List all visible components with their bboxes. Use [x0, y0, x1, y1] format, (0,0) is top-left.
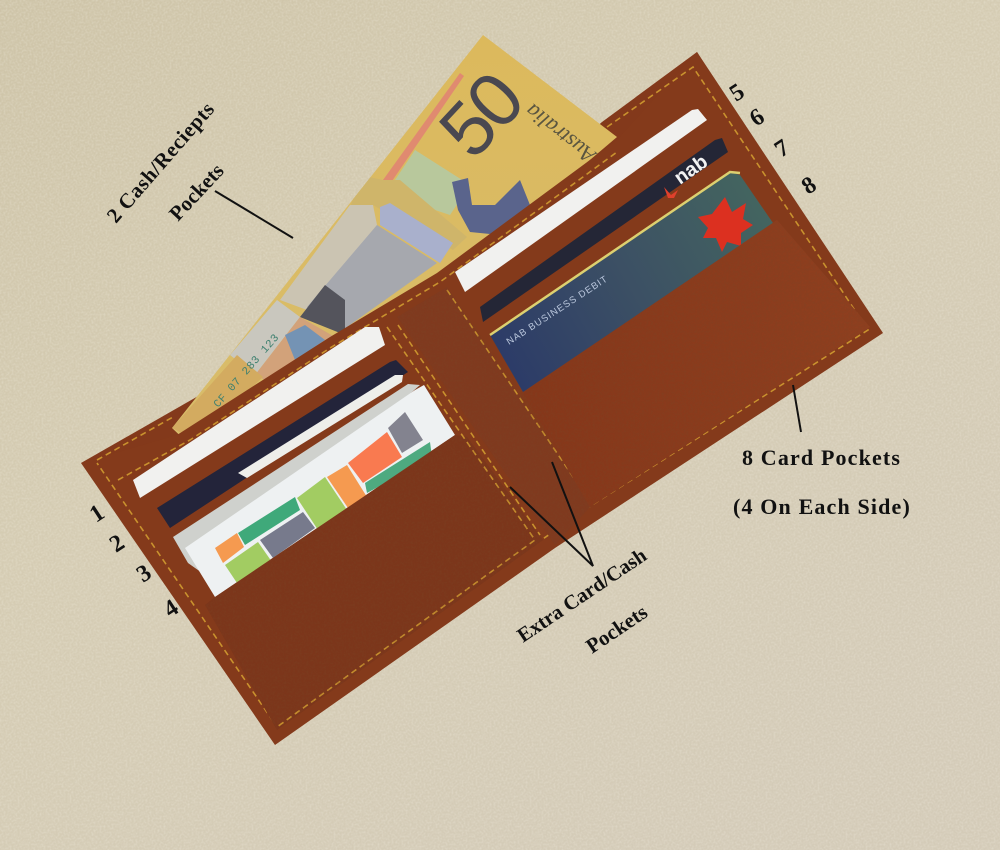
callout: cash pockets: Pockets: [164, 159, 229, 225]
front white card: [185, 385, 455, 597]
white card: [133, 327, 385, 498]
right side cards: [455, 109, 773, 392]
pocket numbers right: [725, 79, 821, 200]
pocket numbers right: 6: [745, 104, 769, 132]
blue debit card: [490, 172, 773, 392]
card behind: [238, 375, 403, 478]
right side cards: nab: [670, 151, 712, 189]
callout: card pockets: (4 On Each Side): [733, 494, 911, 519]
note value: 50: [423, 58, 539, 174]
wallet back panel: [81, 52, 740, 500]
pocket numbers left: 4: [159, 595, 183, 623]
right front pocket: [523, 220, 870, 507]
pocket numbers left: 1: [85, 500, 109, 528]
left side cards: [133, 327, 455, 597]
pocket numbers right: 8: [797, 172, 821, 200]
note country name: Australia: [520, 99, 602, 170]
pocket numbers left: [85, 500, 183, 623]
leather grain: [240, 290, 570, 726]
pocket numbers left: 3: [132, 560, 156, 588]
left front pocket: [205, 327, 543, 730]
callout: extra pockets: Extra Card/Cash: [513, 544, 651, 647]
note serial: CF 07 283 123: [212, 332, 282, 411]
pocket numbers left: 2: [105, 530, 129, 558]
black nab card: [480, 138, 728, 322]
callout: cash pockets: 2 Cash/Reciepts: [102, 97, 219, 227]
grey card: [173, 384, 420, 575]
right side cards: NAB BUSINESS DEBIT: [505, 274, 610, 348]
icon: red star logo: [698, 197, 753, 252]
wallet front: [81, 52, 883, 745]
callout: extra pockets: Pockets: [581, 600, 652, 658]
pocket numbers right: 5: [725, 79, 749, 107]
black card: [157, 360, 408, 528]
white card: [455, 109, 707, 292]
bird and figure: [452, 178, 530, 235]
pocket numbers right: 7: [770, 135, 794, 163]
callout: card pockets: [733, 385, 911, 519]
callout: extra pockets: [510, 462, 652, 658]
banknote: [172, 35, 617, 434]
center spine: [397, 287, 592, 545]
callout: card pockets: 8 Card Pockets: [742, 445, 901, 470]
callout: cash pockets: [102, 97, 293, 238]
